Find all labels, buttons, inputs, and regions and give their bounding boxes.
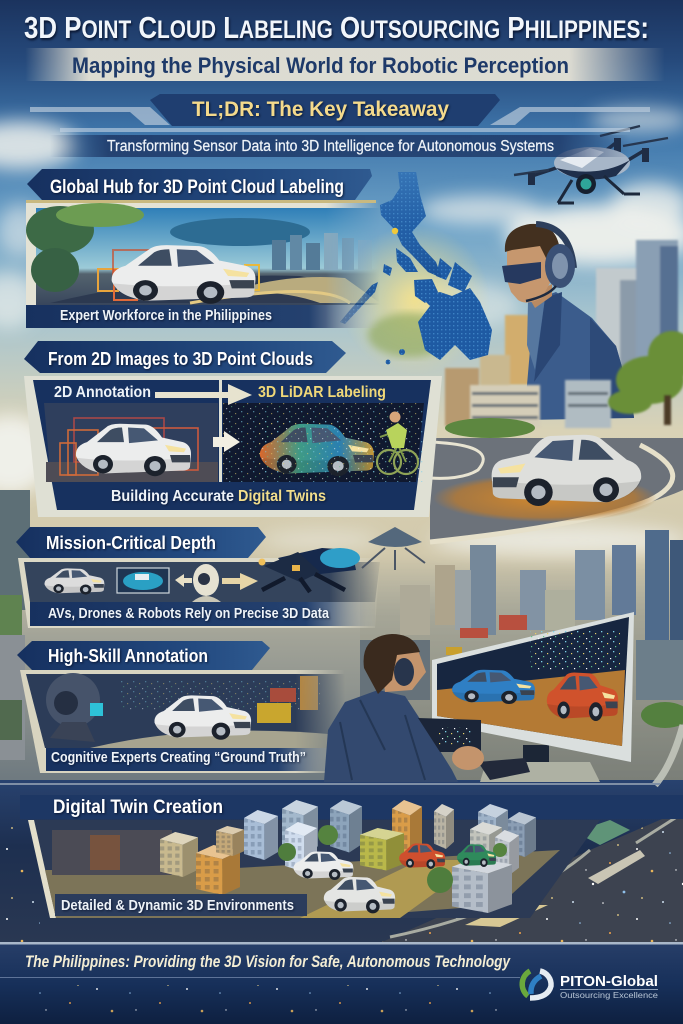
point cloud car (260, 424, 374, 476)
lower navy background (0, 780, 683, 945)
logo tagline: Outsourcing Excellence (560, 990, 658, 1000)
foreground buildings (470, 380, 611, 428)
takeaway strip: Transforming Sensor Data into 3D Intelligence for Autonomous Systems (107, 138, 554, 155)
TL;DR banner (30, 94, 650, 132)
icon: sensor screen (117, 568, 169, 593)
white car (76, 424, 191, 476)
takeaway strip (50, 135, 630, 157)
foliage under map (368, 313, 452, 357)
caption: AVs, Drones & Robots Rely on Precise 3D Data (48, 605, 330, 622)
subtitle banner: Mapping the Physical World for Robotic Perception (72, 53, 569, 78)
blue car (452, 670, 535, 704)
drone top right (514, 126, 668, 203)
left image (44, 403, 218, 482)
city: upper right towers (445, 240, 678, 426)
ear cup (545, 244, 575, 288)
goggles (502, 262, 541, 284)
right image (223, 403, 424, 482)
caption: Building Accurate Digital Twins (111, 488, 326, 505)
bezel (432, 612, 634, 762)
speckled star ground (0, 820, 40, 945)
panel: digital twin creation (0, 783, 683, 918)
left side city (0, 490, 30, 760)
point cloud (530, 630, 620, 670)
icon: webcam sensor (192, 564, 221, 602)
icon: small drone (362, 527, 425, 570)
headset band (536, 224, 574, 268)
white car (154, 695, 251, 740)
speckles (30, 985, 510, 1021)
icon: car (45, 568, 104, 595)
label 3D: 3D LiDAR Labeling (258, 384, 386, 401)
panel base (18, 558, 380, 628)
arrow right (222, 573, 258, 590)
map marker Manila (392, 228, 398, 234)
caption band (55, 894, 307, 916)
title: 3D POINT CLOUD LABELING OUTSOURCING PHILIPPINES: (24, 10, 649, 45)
panel: mission-critical depth (16, 527, 425, 628)
accent line (26, 200, 376, 203)
logo (522, 971, 658, 1000)
white car (112, 245, 256, 304)
cyclist (377, 412, 418, 474)
panel: 2D to 3D (24, 341, 442, 517)
road (430, 435, 683, 542)
digital twin buildings (160, 800, 536, 913)
trees (278, 843, 296, 861)
twin cars (294, 843, 496, 913)
tree right (608, 331, 683, 425)
body (324, 690, 458, 782)
TL;DR banner: TL;DR: The Key Takeaway (192, 98, 449, 121)
dim skyline (52, 830, 172, 875)
hair (505, 224, 560, 262)
panel image (26, 200, 380, 328)
shirt (524, 292, 634, 420)
footer statement: The Philippines: Providing the 3D Vision for Safe, Autonomous Technology (25, 953, 511, 971)
icon: robot head (46, 673, 103, 742)
subtitle banner (25, 48, 665, 81)
stand (523, 745, 549, 763)
header ribbon (27, 169, 372, 200)
analyst at desk (324, 634, 530, 782)
car on road (492, 435, 641, 506)
divider (219, 380, 222, 482)
green plaza (575, 820, 630, 845)
map of the Philippines (340, 172, 492, 364)
panel heading: Global Hub for 3D Point Cloud Labeling (50, 177, 344, 198)
man with goggles and headset (502, 224, 634, 420)
arrow: image to point cloud (213, 431, 240, 452)
header ribbon (17, 641, 270, 670)
band (20, 795, 683, 819)
bounding boxes (60, 418, 198, 475)
monitor (432, 612, 634, 782)
panel base (20, 670, 345, 773)
label 2D: 2D Annotation (54, 384, 151, 401)
frame (24, 376, 442, 517)
header ribbon (24, 341, 346, 373)
icon: drone (258, 548, 360, 592)
red car (547, 673, 618, 721)
hand (452, 746, 484, 770)
ground (45, 850, 560, 918)
header ribbon (16, 527, 266, 558)
road curb lines (390, 813, 683, 937)
yellow sign (257, 703, 291, 723)
floating labels (460, 628, 488, 638)
keyboard (478, 758, 530, 780)
bounding boxes (98, 250, 259, 300)
headset (394, 658, 414, 686)
shrubs near road (445, 418, 535, 438)
caption: Detailed & Dynamic 3D Environments (61, 897, 294, 914)
mid city (360, 530, 683, 780)
logo name: PITON-Global (560, 973, 658, 990)
panel heading: From 2D Images to 3D Point Clouds (48, 349, 313, 369)
microphone (526, 286, 556, 301)
caption: Cognitive Experts Creating “Ground Truth” (51, 749, 306, 766)
head (378, 637, 426, 692)
clouds (0, 108, 683, 556)
panel frame (28, 820, 600, 918)
panel: global hub (26, 169, 380, 328)
face (503, 245, 554, 303)
footer (0, 942, 683, 1024)
screen ground (437, 670, 625, 746)
panel: high-skill annotation (17, 641, 345, 773)
neck (528, 284, 552, 308)
road markings (465, 850, 645, 927)
Philippines glow (340, 225, 490, 375)
panel heading: Mission-Critical Depth (46, 532, 216, 553)
arrow: 2D annotation to LiDAR (155, 384, 252, 405)
caption: Expert Workforce in the Philippines (60, 308, 272, 324)
arrow left (175, 574, 192, 587)
tablet (418, 718, 481, 752)
logo mark (522, 971, 551, 998)
panel heading: Digital Twin Creation (53, 797, 223, 818)
curved cream road edge (655, 725, 683, 785)
panel heading: High-Skill Annotation (48, 646, 208, 666)
